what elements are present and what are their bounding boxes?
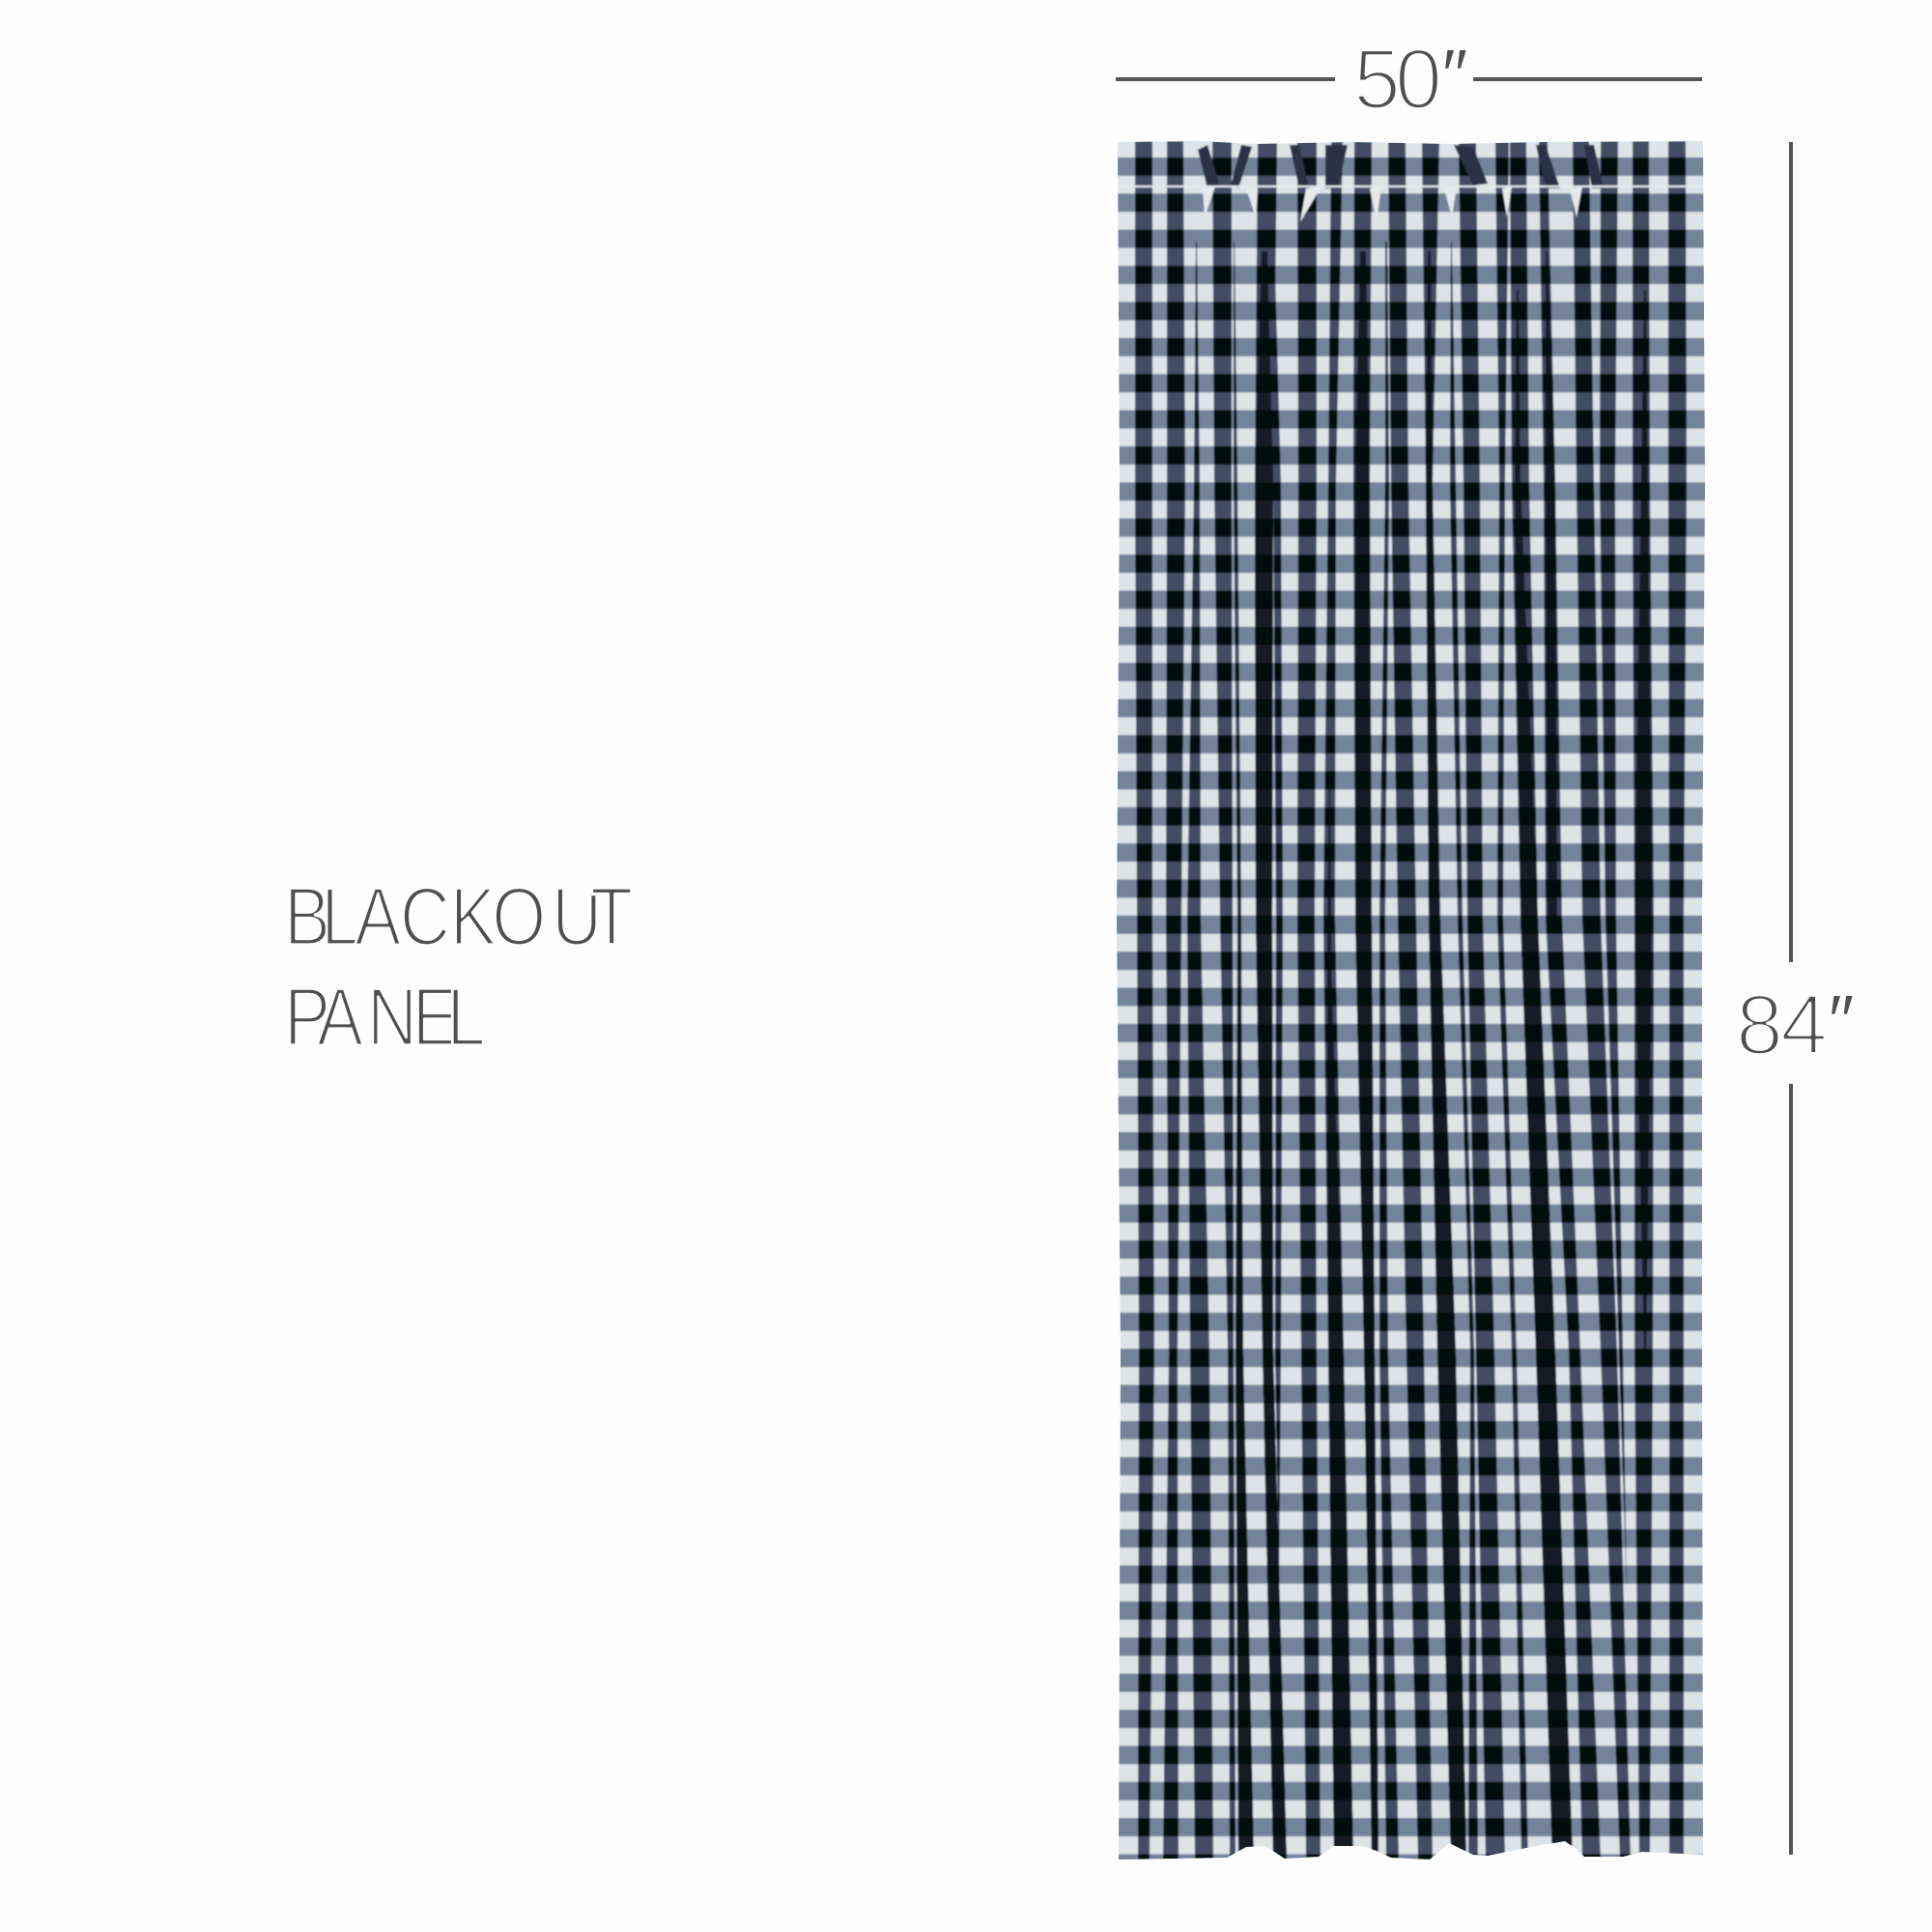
curtain: gingham panel [1111,135,1715,1864]
label: blackout panel: PANEL [284,971,486,1063]
infographic canvas [291,50,1853,1860]
dimension: width 50 inches: ″ [1438,35,1467,117]
label: blackout panel: BLACKOUT [284,870,633,962]
label: blackout panel [284,870,633,1063]
dimension: height 84 inches: ″ [1825,980,1854,1063]
dimension: width 50 inches [1116,31,1702,127]
dimension: height 84 inches: 84 [1736,977,1828,1072]
dimension: width 50 inches: 50 [1353,31,1442,127]
dimension: height 84 inches [1736,142,1854,1855]
